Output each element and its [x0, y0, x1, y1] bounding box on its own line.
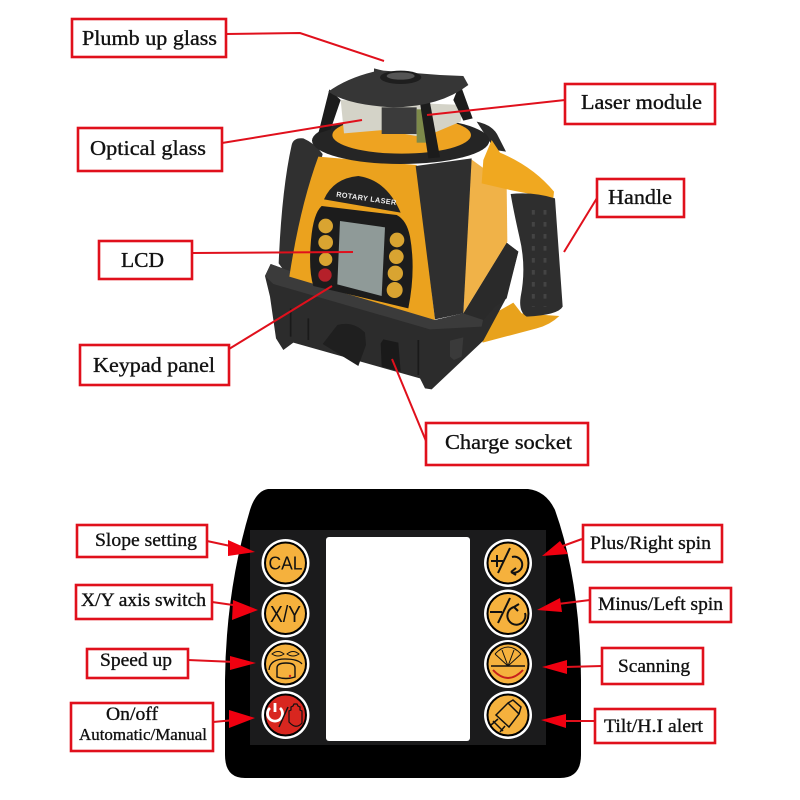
label: Plumb up glass: Plumb up glass [82, 26, 217, 50]
callout: Plus/Right spin [542, 525, 722, 562]
button: scanning [484, 640, 532, 688]
central black column [416, 158, 472, 319]
rotary laser badge: ROTARY LASER [336, 190, 398, 207]
button: CAL [262, 539, 310, 587]
label: Laser module: Laser module [581, 90, 702, 114]
callout: Slope setting: Slope setting [95, 530, 198, 551]
button: power and manual [262, 691, 310, 739]
top cap with plumb glass [328, 68, 468, 107]
label: Optical glass: Optical glass [90, 136, 206, 160]
rotary laser badge [324, 176, 401, 213]
label: LCD [99, 241, 192, 279]
callout lines: upper [192, 33, 597, 441]
label: Charge socket: Charge socket [445, 430, 572, 454]
callout: X/Y axis switch: X/Y axis switch [81, 590, 207, 611]
callout: Minus/Left spin: Minus/Left spin [598, 594, 724, 615]
button: X/Y [262, 590, 310, 638]
charge socket cover [381, 339, 401, 372]
callout: Tilt/H.I alert: Tilt/H.I alert [604, 716, 704, 737]
callout: Plus/Right spin: Plus/Right spin [590, 533, 712, 554]
button: speed up [262, 640, 310, 688]
callout: On/off Automatic/Manual: Automatic/Manual [79, 725, 207, 744]
button: CAL: CAL [268, 554, 302, 574]
label: LCD: LCD [121, 248, 164, 272]
callout: Tilt/H.I alert [541, 709, 715, 743]
button: plus right spin [484, 539, 532, 587]
yellow body [289, 157, 435, 320]
callout: X/Y axis switch [76, 585, 258, 620]
right yellow side [463, 158, 507, 313]
callout: On/off Automatic/Manual [71, 703, 255, 751]
button: tilt alert [484, 691, 532, 739]
head ring and laser module [312, 83, 489, 164]
label: Handle: Handle [608, 185, 672, 209]
handle lower yellow foot [480, 303, 559, 343]
label: Keypad panel [80, 345, 229, 385]
label: Charge socket [426, 423, 588, 465]
button: X/Y: X/Y [270, 601, 301, 627]
label: Handle [597, 179, 684, 217]
callout: Speed up: Speed up [100, 650, 172, 671]
inner dark plate [250, 530, 546, 745]
label: Optical glass [78, 128, 222, 171]
base tray [265, 243, 518, 389]
label: Plumb up glass [72, 19, 226, 57]
callout: Minus/Left spin [537, 588, 731, 622]
callout: Scanning [542, 648, 703, 684]
callout: On/off Automatic/Manual: On/off [106, 704, 159, 725]
product photo: rotary laser [265, 68, 563, 389]
LCD screen [337, 221, 385, 296]
label: Keypad panel: Keypad panel [93, 353, 215, 377]
callout: Scanning: Scanning [618, 656, 691, 677]
callout: Speed up [87, 649, 256, 678]
keypad panel on device [310, 206, 413, 308]
level latch [323, 324, 366, 366]
callout: Slope setting [77, 525, 255, 557]
button: minus left spin [484, 590, 532, 638]
handle [477, 122, 563, 317]
label: Laser module [565, 84, 715, 124]
left black column [279, 138, 323, 283]
blank display [326, 537, 470, 741]
keypad diagram panel [225, 489, 581, 778]
